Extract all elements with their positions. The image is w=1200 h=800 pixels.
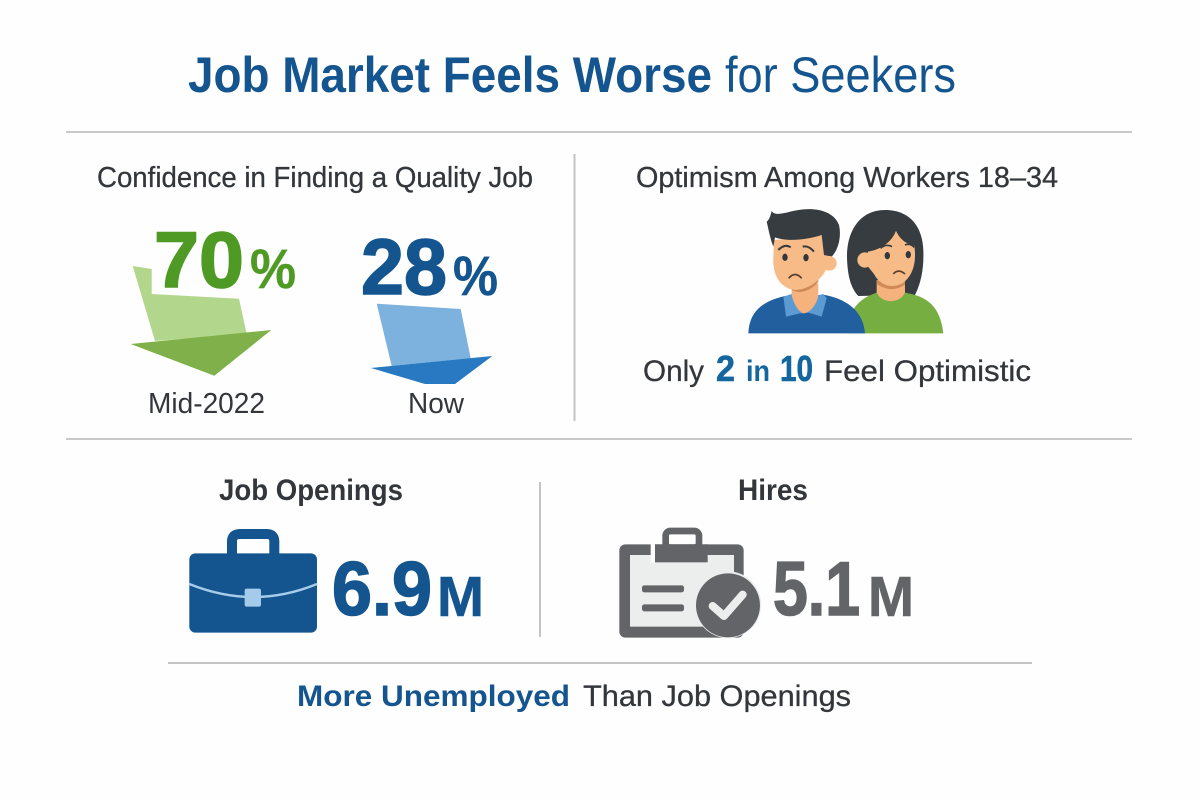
arrow: blue down arrow (371, 304, 492, 384)
callout: only 2 in 10 feel optimistic: Feel Optimistic (824, 355, 1031, 388)
heading: optimism: Optimism Among Workers 18–34 (636, 162, 1058, 194)
label: now: Now (408, 388, 465, 420)
stat: 28%: % (453, 244, 498, 307)
panel: hires (619, 474, 914, 638)
stat: 70%: 70 (154, 215, 244, 304)
footer statement: Than Job Openings (583, 680, 851, 713)
label: mid-2022: Mid-2022 (148, 388, 265, 420)
icon: clipboard with check (619, 531, 761, 638)
stat: 28% (361, 222, 498, 311)
stat: 70%: % (250, 237, 296, 300)
stat: 5.1M: M (868, 565, 914, 629)
woman (847, 210, 923, 296)
stat: 6.9M (332, 547, 484, 632)
panel: optimism among workers 18-34 (636, 162, 1058, 389)
title: for Seekers (725, 47, 956, 103)
panel: job openings (189, 474, 484, 633)
stat: 28%: 28 (361, 222, 447, 311)
title: Job Market Feels Worse (188, 47, 712, 103)
heading: hires: Hires (738, 474, 808, 507)
callout: only 2 in 10 feel optimistic: in (746, 355, 770, 388)
stat: 6.9M: 6.9 (332, 547, 432, 632)
footer statement (297, 680, 851, 713)
callout: only 2 in 10 feel optimistic: Only (643, 355, 704, 388)
man (748, 295, 865, 333)
heading: confidence: Confidence in Finding a Quality Job (97, 162, 533, 194)
stat: 6.9M: M (437, 565, 484, 629)
stat: 5.1M: 5.1 (773, 547, 860, 632)
callout: only 2 in 10 feel optimistic: 2 (716, 348, 735, 389)
icon: two worried young workers (748, 209, 943, 333)
stat: 70% (154, 215, 296, 304)
callout: only 2 in 10 feel optimistic (643, 348, 1031, 389)
panel: confidence in finding a quality job (97, 162, 533, 420)
callout: only 2 in 10 feel optimistic: 10 (780, 348, 813, 389)
icon: briefcase (189, 534, 317, 633)
heading: job openings: Job Openings (219, 474, 403, 507)
footer statement: More Unemployed (297, 680, 570, 713)
arrow: green down arrow (131, 266, 271, 376)
